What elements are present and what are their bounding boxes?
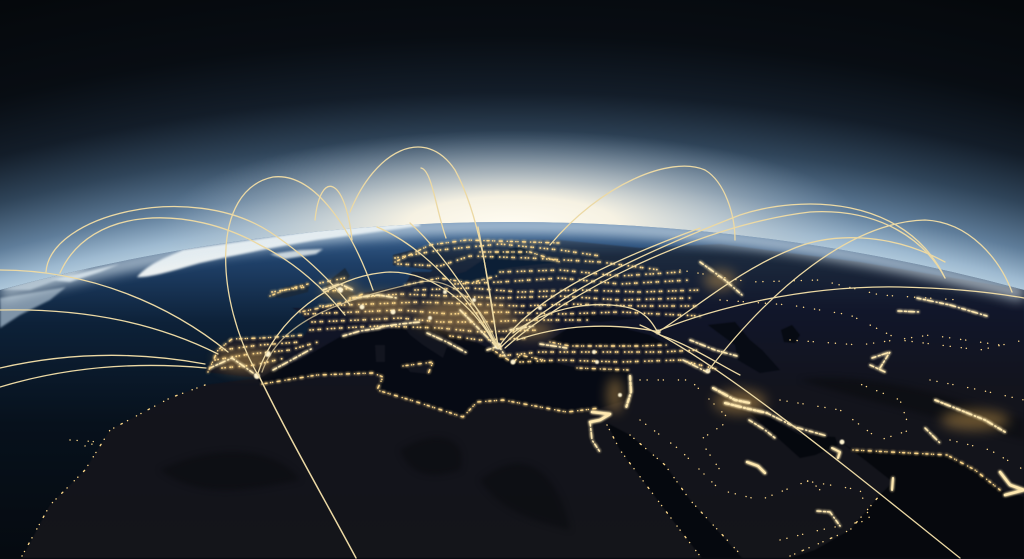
- ocean: [0, 222, 1024, 559]
- arcs: eastern hub: [640, 220, 1024, 558]
- globe surface: [0, 222, 1024, 559]
- sea: Aral: [781, 325, 800, 343]
- arcs: central hub: [315, 147, 945, 348]
- land: Italy and islands: [376, 326, 466, 374]
- land: terrain relief: [820, 381, 900, 390]
- city lights: Asia and Arabia scattered dots: [70, 270, 1024, 540]
- sea: Persian Gulf: [750, 413, 838, 458]
- land: continents base: [22, 240, 1024, 558]
- sea: Arabian Sea: [794, 450, 1024, 558]
- city lights: European and Mediterranean coastlines: [208, 240, 1000, 490]
- sea: Azov and Marmara: [569, 314, 634, 322]
- sea: Black Sea: [550, 325, 667, 346]
- city lights: broad glow: [215, 270, 1009, 430]
- sea: Red Sea: [607, 423, 742, 558]
- sea: Caspian: [708, 322, 780, 373]
- network arcs: [0, 147, 1024, 558]
- city lights: Europe dense dots: [215, 244, 720, 370]
- arcs: western hub: [0, 177, 498, 558]
- land: Greenland and northern ice: [0, 222, 420, 328]
- city lights: bright regions: [210, 262, 1024, 526]
- sea: Baltic: [446, 247, 553, 282]
- city lights: sparse African and Red Sea coastlines: [22, 385, 880, 556]
- city lights: bright hubs: [254, 287, 844, 444]
- horizon haze: [0, 226, 1024, 294]
- sea: Mediterranean: [258, 324, 630, 417]
- land: Britain and Ireland: [267, 268, 355, 300]
